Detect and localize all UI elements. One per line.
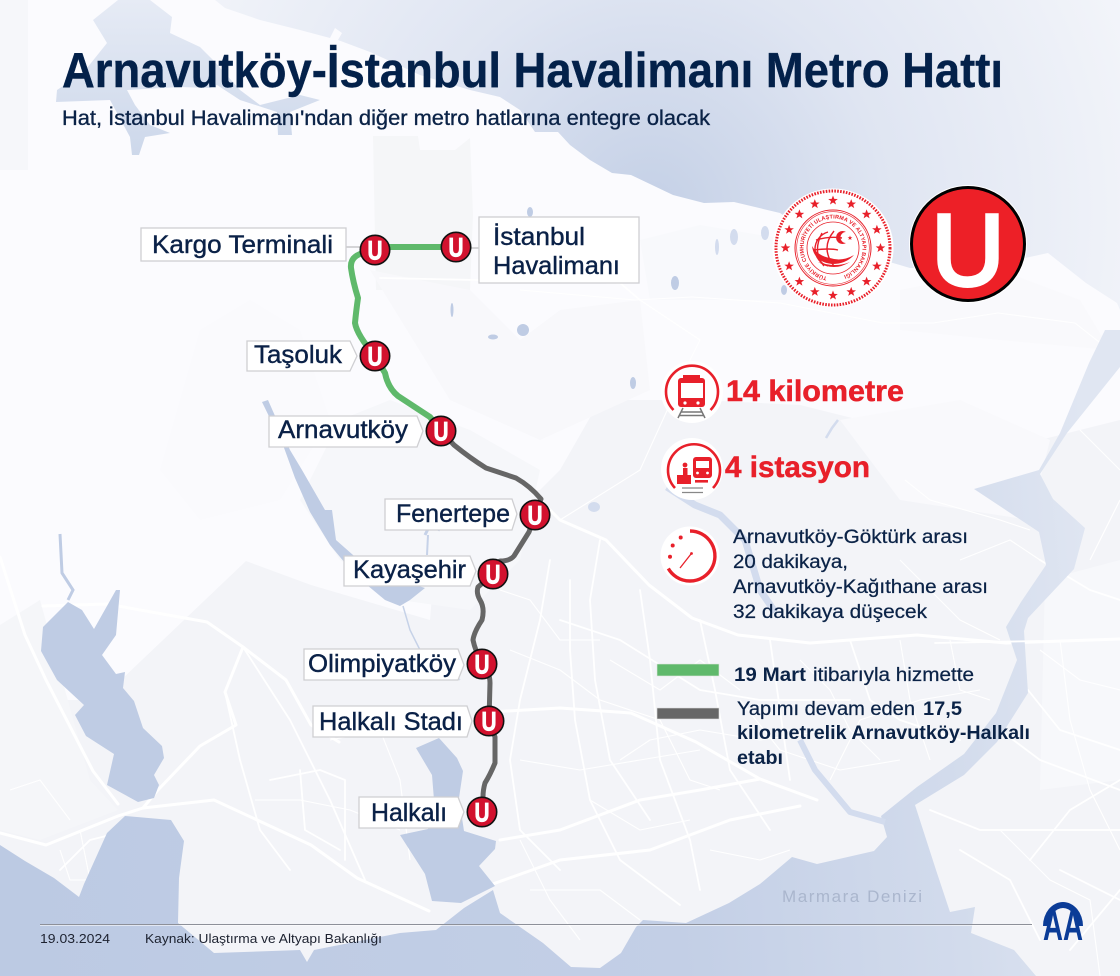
- route: in service (green): [351, 247, 456, 431]
- label: Olimpiyatköy: Olimpiyatköy: [308, 650, 457, 678]
- text: travel times: Arnavutköy-Göktürk arası: [733, 527, 968, 548]
- station: Halkalı Stadı: U: [482, 706, 496, 736]
- legend: under construction: [657, 699, 1030, 769]
- station: Taşoluk: [360, 341, 390, 372]
- station: Halkalı Stadı: [474, 706, 504, 736]
- stat: 4 istasyon: 4 istasyon: [725, 451, 870, 484]
- reservoir: Alibeyköy: [667, 487, 775, 612]
- label: Fenertepe: Fenertepe: [396, 500, 510, 528]
- reservoir: Sazlıdere: [262, 400, 460, 680]
- station: Kargo Terminali: [360, 235, 390, 266]
- subtitle: Hat, İstanbul Havalimanı'ndan diğer metro hatlarına entegre olacak: [62, 107, 711, 130]
- route: under construction (gray): [441, 431, 541, 812]
- label: Kargo Terminali: [141, 228, 364, 261]
- label: Halkalı: Halkalı: [371, 799, 447, 827]
- label: Kargo Terminali: Kargo Terminali: [152, 231, 333, 259]
- sea label: Marmara Denizi: Marmara Denizi: [782, 887, 922, 906]
- text: travel times: 32 dakikaya düşecek: [733, 602, 928, 623]
- legend: under construction: Yapımı devam eden: [737, 699, 915, 720]
- text: travel times: [733, 527, 988, 623]
- logo: metro U: U: [932, 195, 1004, 307]
- Marmara Sea and Bosphorus: [0, 330, 1120, 976]
- icon: station: [661, 438, 723, 500]
- station: Fenertepe: U: [528, 500, 542, 530]
- station: Olimpiyatköy: U: [474, 650, 490, 680]
- text: travel times: 20 dakikaya,: [733, 552, 848, 573]
- station: Kayaşehir: [478, 559, 508, 590]
- label: Halkalı: [359, 797, 464, 828]
- station: Halkalı: [467, 797, 497, 828]
- legend: under construction: kilometrelik Arnavutköy-Halkalı: [737, 723, 1030, 744]
- station: Arnavutköy: [426, 416, 456, 446]
- icon: train: [661, 361, 723, 423]
- footer source: Kaynak: Ulaştırma ve Altyapı Bakanlığı: [145, 932, 382, 946]
- small ponds: [450, 207, 838, 512]
- logo: metro U: [909, 185, 1027, 307]
- station: Olimpiyatköy: [467, 649, 497, 680]
- station: Kargo Terminali: U: [368, 236, 382, 266]
- emblem: ministry seal: TÜRKİYE CUMHURİYETİ ULAŞTIRMA VE ALTYAPI BAKANLIĞI: [800, 214, 866, 280]
- emblem: ministry seal: [774, 188, 894, 306]
- logo: AA: AA: [1043, 902, 1083, 950]
- logo: AA: [1043, 902, 1083, 950]
- station: Halkalı: U: [474, 798, 490, 828]
- label: Halkalı Stadı: Halkalı Stadı: [319, 708, 463, 736]
- legend: in service: itibarıyla hizmette: [813, 665, 974, 686]
- legend: under construction: etabı: [737, 748, 783, 769]
- icon: clock: [660, 526, 720, 586]
- station: Fenertepe: [520, 500, 550, 530]
- lake: Büyükçekmece: [41, 534, 164, 802]
- footer date: 19.03.2024: [40, 932, 110, 946]
- lake: Küçükçekmece: [400, 738, 496, 903]
- label: İstanbul Havalimanı: İstanbul: [493, 222, 585, 251]
- legend: under construction: 17,5: [923, 699, 962, 720]
- station: Taşoluk: U: [368, 342, 382, 372]
- Golden Horn: [800, 740, 885, 822]
- label: İstanbul Havalimanı: Havalimanı: [493, 252, 620, 280]
- label: İstanbul Havalimanı: [470, 217, 639, 283]
- label: Taşoluk: Taşoluk: [254, 341, 343, 369]
- footer rule: [40, 924, 1032, 926]
- title: Arnavutköy-İstanbul Havalimanı Metro Hattı: [62, 44, 1003, 98]
- legend: in service: 19 Mart: [734, 665, 807, 686]
- station: İstanbul Havalimanı: [441, 232, 471, 262]
- bridges: [935, 641, 1040, 643]
- station: İstanbul Havalimanı: U: [448, 232, 464, 262]
- lake: Terkos: [56, 0, 320, 155]
- legend: in service: [657, 664, 974, 686]
- label: Arnavutköy: Arnavutköy: [278, 416, 409, 444]
- stat: 14 kilometre: 14 kilometre: [726, 375, 904, 408]
- Black Sea: [215, 0, 1120, 310]
- station: Arnavutköy: U: [434, 416, 448, 446]
- text: travel times: Arnavutköy-Kağıthane arası: [733, 577, 988, 598]
- station: Kayaşehir: U: [486, 560, 500, 590]
- label: Kayaşehir: Kayaşehir: [353, 556, 466, 584]
